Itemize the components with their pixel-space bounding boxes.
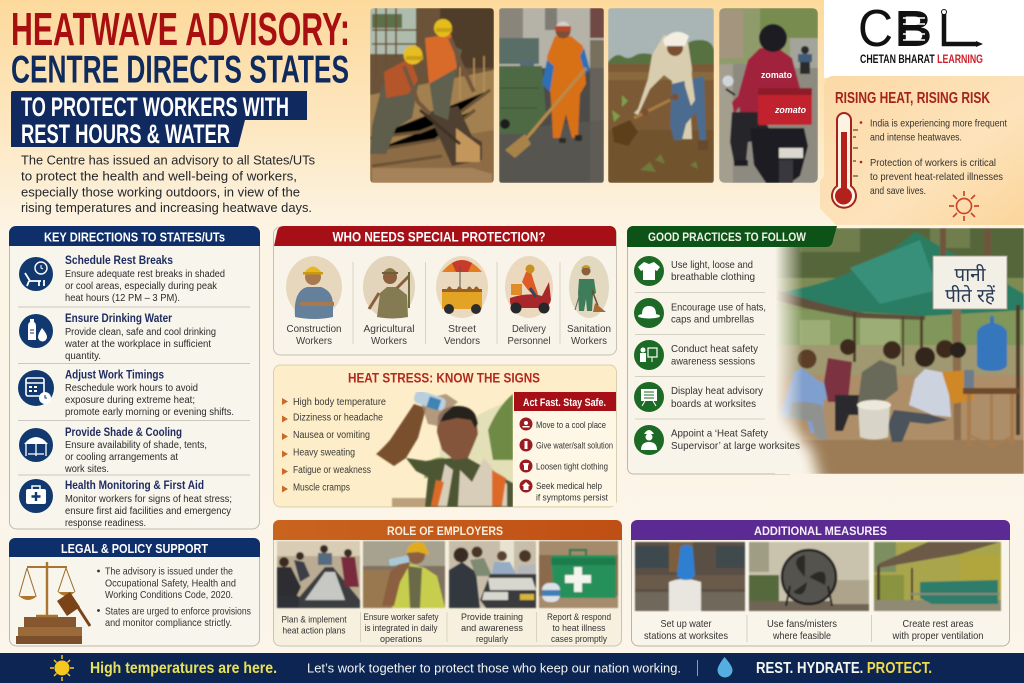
header: ROLE OF EMPLOYERS bbox=[387, 524, 503, 538]
card: rest areas: Create rest areas bbox=[902, 619, 974, 630]
list: symptoms: Nausea or vomiting bbox=[293, 430, 370, 441]
item: adjust work timings: promote early morning or evening shifts. bbox=[65, 407, 234, 418]
icon: lounge chair and clock bbox=[19, 257, 53, 291]
item: schedule rest breaks bbox=[19, 254, 225, 304]
item: ensure drinking water: Ensure Drinking Water bbox=[65, 312, 172, 325]
callout: act fast, stay safe: if symptoms persist bbox=[536, 492, 608, 502]
practice: supervisor bbox=[634, 425, 800, 455]
card: fans: where feasible bbox=[772, 631, 831, 642]
intro paragraph: especially those working outdoors, in view of the bbox=[21, 184, 300, 200]
card: heat action plans bbox=[277, 541, 360, 636]
practice: hats: caps and umbrellas bbox=[671, 314, 754, 326]
list: symptoms: High body temperature bbox=[293, 397, 386, 408]
header: KEY DIRECTIONS TO STATES/UTs bbox=[44, 230, 225, 244]
text: risk bullets: Protection of workers is critical bbox=[870, 158, 996, 169]
photo: worker drinking water bbox=[376, 389, 513, 507]
item: adjust work timings: Reschedule work hours to avoid bbox=[65, 383, 198, 394]
item: adjust work timings: Adjust Work Timings bbox=[65, 368, 164, 382]
worker: delivery personnel: Personnel bbox=[508, 336, 550, 347]
header: WHO NEEDS SPECIAL PROTECTION? bbox=[332, 230, 546, 244]
card: worker safety: operations bbox=[380, 634, 422, 645]
practice: hats: Encourage use of hats, bbox=[671, 302, 766, 314]
text: legal bullets: Working Conditions Code, 2020. bbox=[105, 590, 233, 601]
practice: supervisor: Appoint a ‘Heat Safety bbox=[671, 428, 769, 440]
header: ADDITIONAL MEASURES bbox=[754, 524, 887, 538]
item: health monitoring bbox=[19, 479, 232, 529]
item: ensure drinking water: water at the workplace in sufficient bbox=[64, 339, 211, 350]
card: fans: Use fans/misters bbox=[767, 619, 837, 630]
photo: water dispenser bbox=[635, 542, 745, 611]
worker: agricultural: Workers bbox=[371, 336, 407, 347]
card: heat action plans: heat action plans bbox=[282, 626, 346, 636]
photo: meeting bbox=[277, 541, 360, 608]
practice: awareness bbox=[634, 340, 759, 370]
practice: boards bbox=[634, 382, 764, 412]
photo: workers resting under tent: पीते रहें bbox=[945, 284, 996, 307]
footer: high temperatures: High temperatures are here. bbox=[90, 660, 277, 677]
worker: street vendor cart: Street bbox=[448, 324, 476, 335]
text: legal bullets: States are urged to enforce provisions bbox=[105, 606, 251, 618]
text: legal bullets: Occupational Safety, Health and bbox=[105, 578, 236, 590]
logo letters: C bbox=[858, 0, 893, 58]
worker: sanitation: Sanitation bbox=[567, 324, 611, 335]
item: health monitoring: response readiness. bbox=[65, 518, 146, 529]
header bbox=[9, 226, 260, 246]
item: provide shade bbox=[19, 426, 207, 475]
card: water stations: stations at worksites bbox=[644, 631, 728, 642]
panel: good practices bbox=[627, 226, 1024, 490]
text: legal bullets: The advisory is issued under the bbox=[105, 566, 233, 578]
header: GOOD PRACTICES TO FOLLOW bbox=[648, 230, 807, 244]
card: report and respond: Report & respond bbox=[547, 612, 611, 623]
item: schedule rest breaks: Ensure adequate rest breaks in shaded bbox=[65, 269, 225, 280]
card: training bbox=[449, 541, 536, 645]
icon: bottle and drop bbox=[19, 314, 53, 348]
worker: agricultural bbox=[363, 256, 415, 347]
card: training: regularly bbox=[476, 634, 508, 645]
icon: t-shirt bbox=[634, 256, 664, 286]
callout: act fast, stay safe: Seek medical help bbox=[536, 481, 602, 491]
text: legal bullets: and monitor compliance strictly. bbox=[105, 618, 232, 629]
photo: sanitation worker bbox=[499, 8, 604, 183]
photo: first aid box bbox=[539, 541, 618, 608]
icon: first aid kit bbox=[19, 479, 53, 513]
heading: heatwave advisory: HEATWAVE ADVISORY: bbox=[11, 3, 350, 55]
header bbox=[627, 226, 837, 247]
card: rest areas: with proper ventilation bbox=[892, 631, 984, 642]
footer banner bbox=[0, 653, 1024, 683]
header: LEGAL & POLICY SUPPORT bbox=[61, 542, 208, 556]
worker: street vendor cart bbox=[436, 256, 488, 347]
item: provide shade: work sites. bbox=[64, 464, 109, 475]
callout: act fast, stay safe: Act Fast. Stay Safe. bbox=[523, 397, 606, 409]
photo: delivery rider: zomato bbox=[774, 105, 806, 116]
card: fans bbox=[749, 542, 869, 642]
list: symptoms: Heavy sweating bbox=[293, 448, 355, 458]
item: schedule rest breaks: Schedule Rest Breaks bbox=[65, 254, 173, 267]
icon: calendar and clock bbox=[18, 370, 54, 406]
practice: awareness: Conduct heat safety bbox=[671, 344, 759, 355]
panel: rising heat, rising risk bbox=[820, 76, 1024, 225]
intro paragraph: to protect the health and well-being of workers, bbox=[21, 168, 297, 184]
icon: tent and lounger bbox=[19, 428, 53, 462]
callout: act fast, stay safe bbox=[513, 392, 616, 506]
panel: role of employers bbox=[273, 520, 622, 646]
icon: scales, gavel and books bbox=[16, 562, 90, 644]
logo letters bbox=[858, 0, 983, 58]
photo: workers resting under tent: पानी bbox=[954, 263, 987, 286]
list: symptoms: Dizziness or headache bbox=[293, 412, 383, 424]
card: report and respond: to heat illness bbox=[552, 623, 606, 634]
text: risk bullets: to prevent heat-related illnesses bbox=[870, 172, 1003, 183]
practice: clothing: Use light, loose and bbox=[671, 260, 753, 271]
callout: act fast, stay safe: Give water/salt solution bbox=[536, 440, 613, 450]
photo: delivery rider: zomato bbox=[761, 70, 792, 81]
card: report and respond bbox=[539, 541, 618, 645]
item: schedule rest breaks: heat hours (12 PM – 3 PM). bbox=[65, 293, 180, 304]
card: worker safety bbox=[363, 541, 445, 645]
icon: trainer and board bbox=[634, 340, 664, 370]
worker: street vendor cart: Vendors bbox=[444, 336, 480, 347]
list: symptoms bbox=[282, 397, 386, 494]
item: schedule rest breaks: or cool areas, especially during peak bbox=[65, 281, 218, 292]
header bbox=[274, 226, 616, 246]
item: provide shade: Provide Shade & Cooling bbox=[65, 426, 182, 439]
intro paragraph bbox=[21, 152, 315, 215]
header bbox=[9, 538, 260, 557]
subheading banner: TO PROTECT WORKERS WITH bbox=[21, 92, 289, 122]
icon: display board bbox=[634, 382, 664, 412]
worker: construction: Construction bbox=[286, 324, 342, 335]
text: risk bullets bbox=[860, 118, 1007, 197]
worker: sanitation bbox=[567, 256, 611, 347]
card: training: and awareness bbox=[461, 623, 523, 634]
intro paragraph: rising temperatures and increasing heatwave days. bbox=[21, 200, 312, 215]
practice: awareness: awareness sessions bbox=[671, 356, 755, 368]
item: adjust work timings bbox=[18, 368, 234, 418]
subheading banner: REST HOURS & WATER bbox=[21, 119, 230, 149]
text: risk bullets: and intense heatwaves. bbox=[870, 132, 962, 144]
photo: large fan bbox=[749, 542, 869, 611]
icon: water drop bbox=[718, 657, 733, 678]
panel: who needs special protection bbox=[274, 226, 616, 355]
practice: supervisor: Supervisor’ at large worksites bbox=[671, 441, 800, 452]
worker: delivery personnel: Delivery bbox=[512, 324, 547, 335]
icon: thermometer bbox=[832, 113, 858, 208]
footer: rest hydrate protect: REST. HYDRATE. PROTECT. bbox=[756, 660, 932, 677]
title block bbox=[11, 3, 350, 215]
subheading banner bbox=[11, 91, 307, 149]
list: symptoms: Fatigue or weakness bbox=[293, 465, 371, 476]
photo: rest shelter and bench bbox=[874, 542, 1001, 611]
heading: HEAT STRESS: KNOW THE SIGNS bbox=[348, 370, 540, 386]
card: water stations bbox=[635, 542, 745, 642]
photo: training session bbox=[449, 541, 536, 608]
worker: sanitation: Workers bbox=[571, 336, 607, 347]
icon: sun bbox=[50, 655, 74, 681]
footer: message: Let’s work together to protect those who keep our nation working. bbox=[307, 660, 681, 676]
card: report and respond: cases promptly bbox=[551, 634, 607, 645]
worker: delivery personnel bbox=[505, 256, 553, 347]
photo: workers resting under tent bbox=[775, 228, 1024, 474]
practice: clothing: breathable clothing bbox=[671, 272, 755, 283]
panel: heat stress signs bbox=[274, 365, 616, 507]
item: ensure drinking water: quantity. bbox=[65, 351, 101, 362]
card: rest areas bbox=[874, 542, 1001, 642]
callout: act fast, stay safe: Loosen tight clothing bbox=[536, 462, 608, 472]
text: risk bullets: and save lives. bbox=[870, 186, 926, 197]
photo: delivery rider bbox=[719, 8, 818, 183]
worker: construction bbox=[286, 256, 342, 347]
text: legal bullets bbox=[97, 566, 251, 629]
item: ensure drinking water: Provide clean, safe and cool drinking bbox=[65, 327, 216, 338]
logo letters: B bbox=[895, 0, 932, 57]
worker: agricultural: Agricultural bbox=[364, 324, 414, 335]
photo: farmer in field bbox=[608, 8, 714, 183]
icon: supervisor bbox=[634, 425, 664, 455]
logo panel bbox=[824, 0, 1024, 78]
item: health monitoring: Monitor workers for signs of heat stress; bbox=[65, 494, 232, 505]
item: provide shade: Ensure availability of shade, tents, bbox=[65, 440, 207, 451]
card: worker safety: is integrated in daily bbox=[364, 623, 438, 634]
item: provide shade: or cooling arrangements at bbox=[65, 452, 178, 463]
practice: boards: Display heat advisory bbox=[671, 386, 764, 397]
header bbox=[631, 520, 1010, 540]
logo wordmark: CHETAN BHARAT LEARNING bbox=[860, 54, 983, 66]
item: ensure drinking water bbox=[19, 312, 216, 362]
photo: construction workers bbox=[370, 8, 494, 183]
practice: hats bbox=[634, 298, 766, 328]
card: heat action plans: Plan & implement bbox=[282, 614, 347, 626]
intro paragraph: The Centre has issued an advisory to all States/UTs bbox=[21, 152, 315, 168]
item: adjust work timings: exposure during extreme heat; bbox=[65, 395, 195, 406]
item: health monitoring: ensure first aid facilities and emergency bbox=[65, 506, 231, 517]
card: worker safety: Ensure worker safety bbox=[364, 612, 439, 623]
worker: construction: Workers bbox=[296, 336, 332, 347]
callout: act fast, stay safe: Move to a cool place bbox=[536, 420, 606, 430]
card: training: Provide training bbox=[461, 612, 523, 623]
panel: key directions bbox=[9, 226, 260, 529]
icon: hat bbox=[634, 298, 664, 328]
card: water stations: Set up water bbox=[660, 619, 712, 630]
heading: centre directs states: CENTRE DIRECTS STATES bbox=[11, 48, 349, 92]
list: symptoms: Muscle cramps bbox=[293, 482, 350, 494]
practice: boards: boards at worksites bbox=[671, 399, 756, 410]
panel: legal and policy support bbox=[9, 538, 260, 646]
icon: sun bbox=[949, 191, 979, 221]
practice: clothing bbox=[634, 256, 755, 286]
header bbox=[273, 520, 622, 540]
photo: worker drinking bbox=[363, 541, 445, 608]
panel: additional measures bbox=[631, 520, 1010, 646]
item: health monitoring: Health Monitoring & First Aid bbox=[65, 479, 204, 492]
